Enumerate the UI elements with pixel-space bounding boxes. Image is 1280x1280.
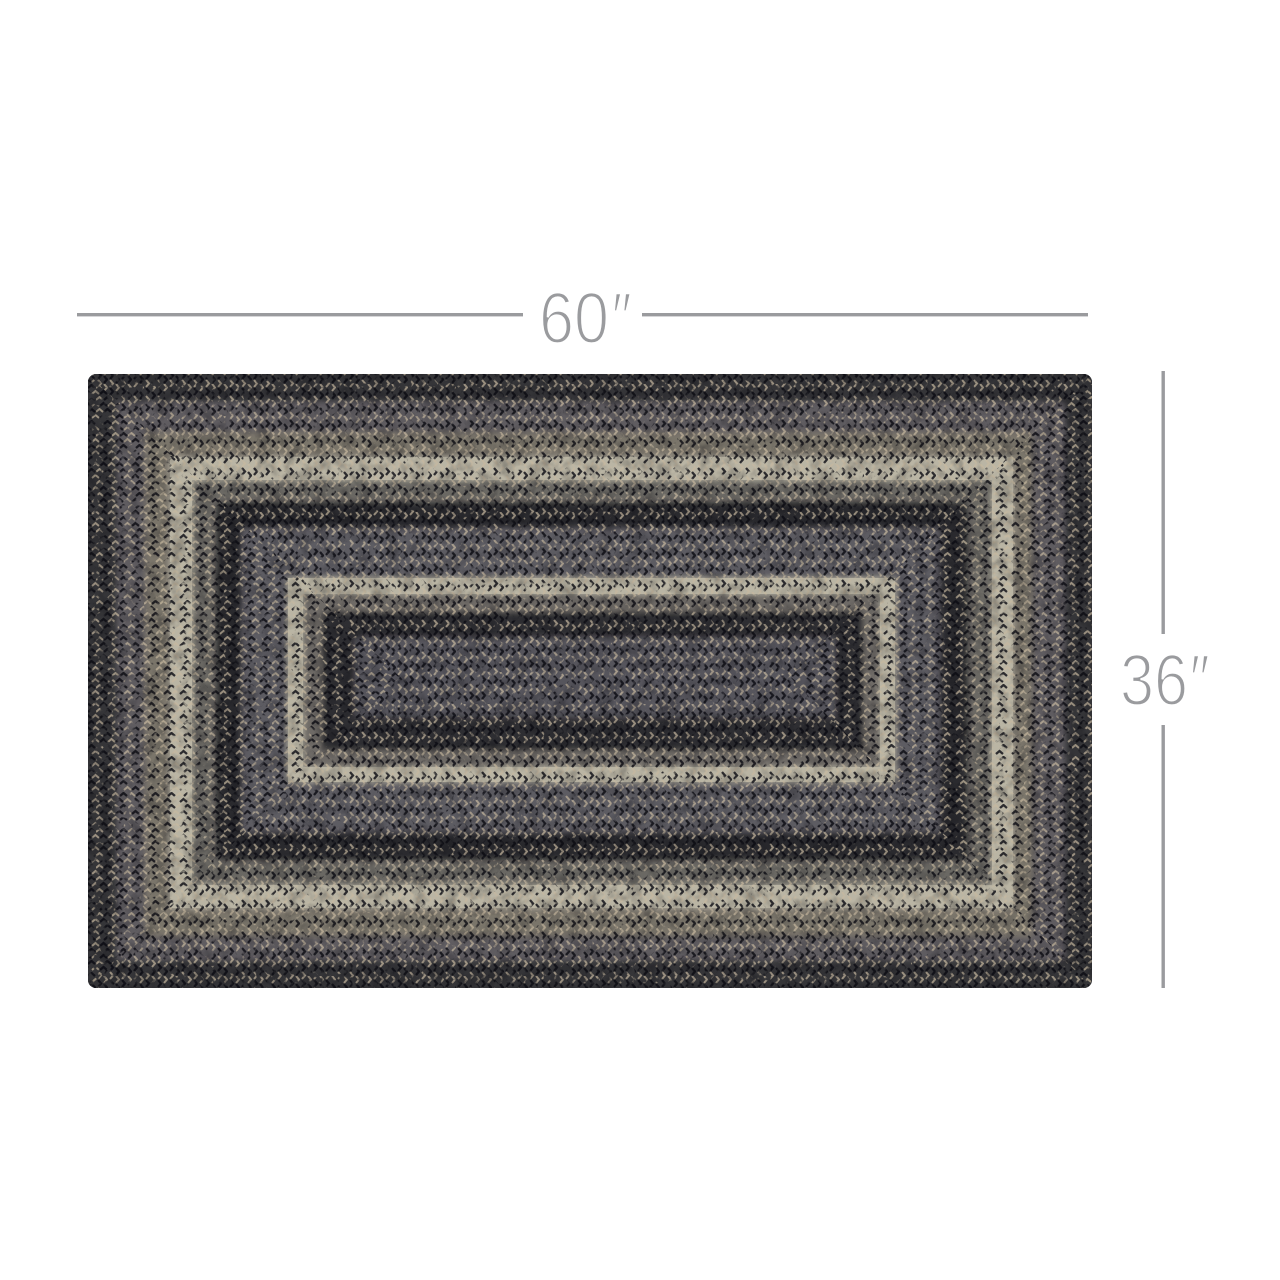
width line right segment bbox=[642, 313, 1088, 316]
height label: 36 bbox=[1120, 641, 1188, 721]
crisp light rings bbox=[170, 457, 1013, 908]
width dimension: 60 inches bbox=[77, 279, 1088, 359]
height line top segment bbox=[1162, 371, 1165, 634]
height label: ″ bbox=[1187, 641, 1209, 721]
height line bottom segment bbox=[1162, 725, 1165, 988]
width line left segment bbox=[77, 313, 523, 316]
yarn colour mottling bbox=[88, 374, 1092, 988]
width label: 60 bbox=[539, 279, 609, 359]
rug base bbox=[88, 374, 1092, 988]
braid texture: horizontal runs bbox=[88, 374, 1092, 988]
width label: ″ bbox=[609, 279, 631, 359]
braid texture: vertical runs bbox=[88, 374, 1092, 988]
concentric rug bands, softly blended bbox=[80, 366, 1100, 996]
braided rug bbox=[80, 366, 1100, 996]
height dimension: 36 inches bbox=[1120, 371, 1209, 988]
